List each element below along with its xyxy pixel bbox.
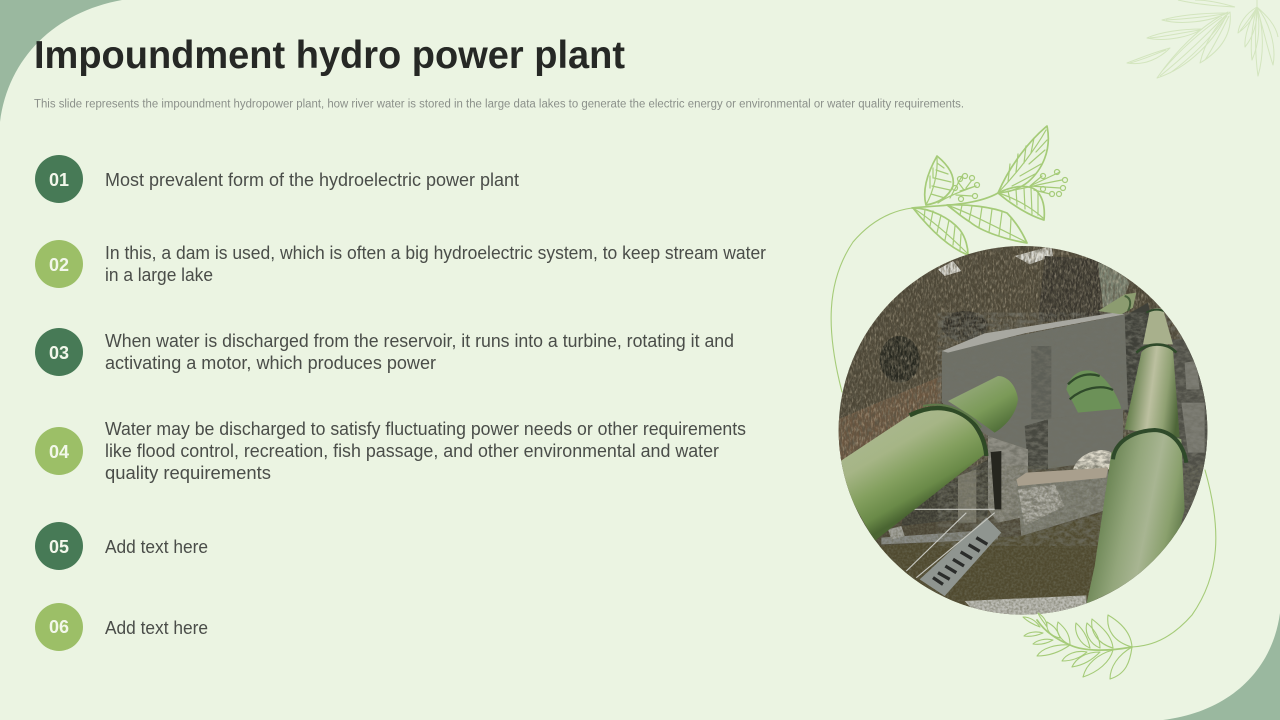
list item 04: quality requirements	[105, 462, 271, 483]
corner shape: bottom right	[1163, 613, 1280, 720]
decoration: lower sprig with curved stem	[1023, 470, 1216, 679]
list item 02	[35, 240, 766, 288]
decoration: top right leaves	[1127, 0, 1278, 78]
title: Impoundment hydro power plant	[34, 34, 625, 77]
list item 01: 01	[49, 170, 69, 190]
corner shape: top left	[0, 0, 122, 122]
list item 01	[35, 155, 519, 203]
list item 05: 05	[49, 537, 69, 557]
list item 04	[35, 418, 746, 483]
list item 02: 02	[49, 255, 69, 275]
subtitle: This slide represents the impoundment hydropower plant, how river water is stored in the large data lakes to generate the electric energy or environmental or water quality requirements.	[34, 98, 964, 110]
list item 05	[35, 522, 208, 570]
list item 04: 04	[49, 442, 69, 462]
decoration: upper sprig with curved stem	[831, 126, 1068, 392]
list item 05: Add text here	[105, 536, 208, 557]
list item 02: In this, a dam is used, which is often a big hydroelectric system, to keep stream water	[105, 242, 766, 263]
list item 06: 06	[49, 617, 69, 637]
list item 01: Most prevalent form of the hydroelectric power plant	[105, 169, 519, 190]
photo: hydro plant pipes in circular frame	[838, 246, 1208, 616]
list item 03: activating a motor, which produces power	[105, 352, 436, 373]
list item 06	[35, 603, 208, 651]
list item 02: in a large lake	[105, 264, 213, 285]
list item 04: like flood control, recreation, fish passage, and other environmental and water	[105, 440, 719, 461]
list item 03: When water is discharged from the reservoir, it runs into a turbine, rotating it and	[105, 330, 734, 351]
list item 03	[35, 328, 734, 376]
list item 04: Water may be discharged to satisfy fluctuating power needs or other requirements	[105, 418, 746, 439]
list item 03: 03	[49, 343, 69, 363]
list item 06: Add text here	[105, 617, 208, 638]
